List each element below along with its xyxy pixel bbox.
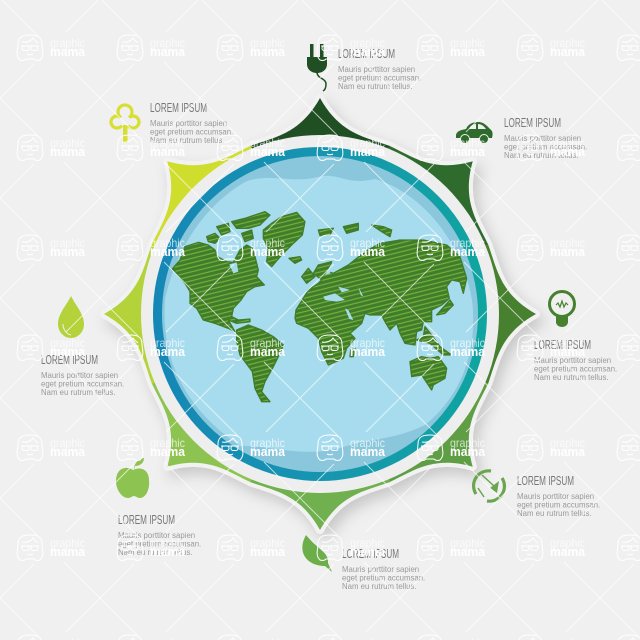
spike: bottom left (118, 265, 369, 516)
text block: right: Mauris porttitor sapien (534, 356, 611, 365)
spike: left (104, 244, 320, 384)
text block: bottom left: eget pretium accumsan. (118, 540, 201, 548)
coloured star spikes (104, 98, 536, 530)
text block: top right: eget pretium accumsan. (504, 142, 587, 152)
text block: right (534, 338, 617, 382)
text block: right: Nam eu rutrum tellus. (534, 373, 609, 382)
globe outer white ring (141, 135, 499, 493)
text block: bottom: Nam eu rutrum tellus. (342, 582, 417, 591)
text block: left: Mauris porttitor sapien (41, 371, 118, 380)
text block: left: eget pretium accumsan. (41, 380, 124, 388)
North America (172, 242, 264, 332)
icon: refresh (474, 471, 504, 501)
text block: bottom right: LOREM IPSUM (517, 474, 574, 488)
text block: top left: eget pretium accumsan. (150, 128, 233, 136)
text block: bottom (342, 547, 425, 591)
text block: top right (504, 116, 587, 160)
Hudson Bay (229, 262, 238, 273)
globe coloured ring (153, 147, 487, 481)
text block: top (338, 47, 421, 91)
world map (172, 212, 467, 402)
Japan (437, 300, 453, 315)
Iceland (289, 257, 302, 263)
text block: bottom right (517, 474, 600, 518)
Eurasia and Africa (295, 240, 467, 365)
text block: bottom left: Mauris porttitor sapien (118, 531, 195, 540)
Australia (410, 357, 447, 390)
spike: top (250, 98, 390, 314)
text block: top: LOREM IPSUM (338, 47, 395, 61)
Americas and Greenland (172, 212, 305, 402)
text block: top right: Nam eu rutrum tellus. (504, 151, 579, 160)
text block: left: LOREM IPSUM (41, 353, 98, 367)
text block: bottom: LOREM IPSUM (342, 547, 399, 561)
spike: top left (118, 112, 369, 363)
icon: water drop (58, 296, 84, 338)
globe light water (165, 176, 473, 452)
text block: right: LOREM IPSUM (534, 338, 591, 352)
text block: top left: Mauris porttitor sapien (150, 119, 227, 128)
South America (237, 325, 283, 402)
spike: bottom (250, 314, 390, 530)
text block: bottom left: Nam eu rutrum tellus. (118, 548, 193, 557)
text block: left (41, 353, 124, 397)
text block: bottom right: Nam eu rutrum tellus. (517, 509, 592, 518)
text block: top: Nam eu rutrum tellus. (338, 82, 413, 91)
Eurasia, Africa and Oceania (295, 223, 467, 390)
icon: light bulb (550, 292, 574, 327)
text block: bottom: Mauris porttitor sapien (342, 565, 419, 574)
inland seas (323, 263, 363, 320)
text block: bottom left (118, 513, 201, 557)
text block: top left: LOREM IPSUM (150, 101, 207, 115)
text block: bottom right: Mauris porttitor sapien (517, 492, 594, 501)
British Isles (302, 268, 315, 283)
spike: bottom right (271, 265, 522, 516)
text block: bottom right: eget pretium accumsan. (517, 500, 600, 510)
icon: apple (116, 458, 149, 498)
text block: top: eget pretium accumsan. (338, 74, 421, 82)
text block: top left (150, 101, 233, 145)
Indonesia (417, 327, 452, 355)
text block: top right: Mauris porttitor sapien (504, 134, 581, 143)
icon: leaf (302, 535, 332, 572)
icon: plug (307, 44, 327, 91)
icon: car (456, 122, 493, 144)
Arctic archipelago (207, 212, 270, 243)
Arctic islands (318, 223, 392, 237)
text block: top: Mauris porttitor sapien (338, 65, 415, 74)
icon: tree (111, 105, 139, 143)
Madagascar (350, 348, 355, 357)
globe (141, 135, 499, 493)
text block: left: Nam eu rutrum tellus. (41, 388, 116, 397)
text block: top right: LOREM IPSUM (504, 116, 561, 130)
globe dark water band (162, 156, 478, 472)
star badge border with shadow (104, 98, 536, 530)
Greenland (263, 212, 305, 267)
text block: bottom: eget pretium accumsan. (342, 574, 425, 582)
text block: right: eget pretium accumsan. (534, 364, 617, 374)
spike: top right (271, 112, 522, 363)
text block: top left: Nam eu rutrum tellus. (150, 136, 225, 145)
text block: bottom left: LOREM IPSUM (118, 513, 175, 527)
spike: right (320, 244, 536, 384)
